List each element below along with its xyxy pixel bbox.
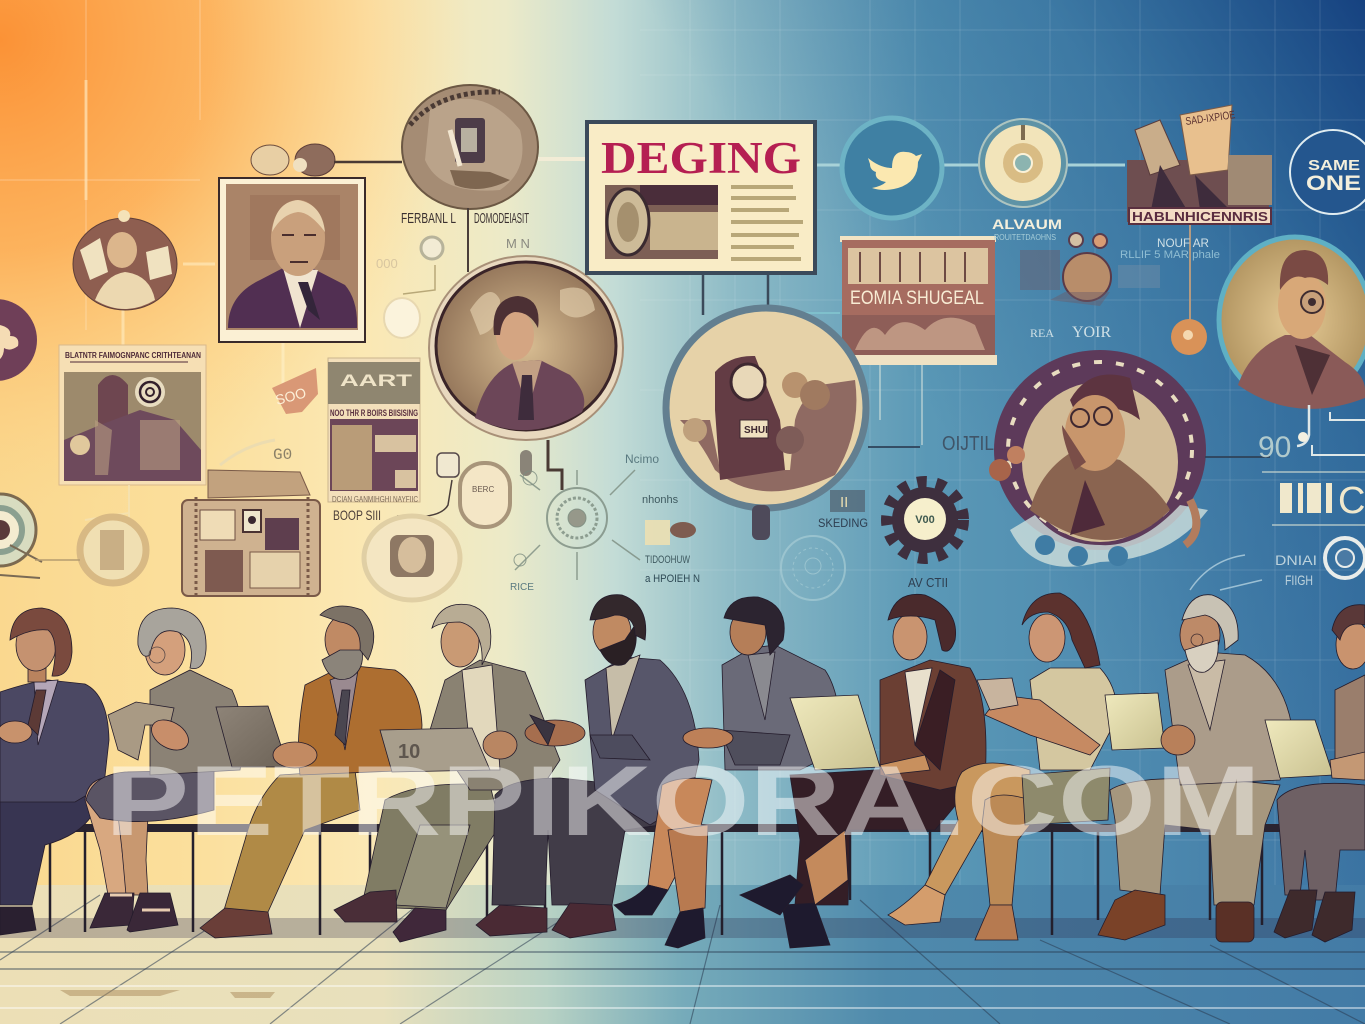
- label OIJTIL: OIJTIL: [942, 433, 994, 455]
- small label G0: G0: [273, 446, 292, 464]
- person 3: bearded man in orange jacket: [200, 606, 422, 938]
- collage of posters: HABLNHICENNRIS: [1132, 209, 1268, 224]
- right-side labels: DNIAI: [1275, 552, 1317, 568]
- person 2: grey-haired woman with magazine: [85, 608, 243, 932]
- chairs row: [40, 824, 1365, 935]
- doodle labels: Ncimo: [625, 452, 659, 466]
- medallion: young man portrait: [429, 256, 623, 440]
- right-side labels: [1190, 412, 1365, 590]
- newsletter board DEGING: [585, 120, 817, 275]
- collage of posters: [1127, 105, 1272, 224]
- faint seal: [781, 536, 845, 600]
- icon: bird in ring: [842, 118, 942, 218]
- doodle labels: a HPOIEH N: [645, 573, 700, 585]
- caption under camera medallion: DOMODEIASIT: [474, 210, 529, 227]
- person 9: old man with tablet: [1098, 595, 1294, 942]
- middle diagram labels: ALVAUM: [992, 216, 1062, 232]
- banner EOMIA SHUGEAL: EOMIA SHUGEAL: [850, 288, 984, 309]
- middle diagram labels: NOUF AR: [1157, 236, 1209, 250]
- medallion: robot figure: [666, 308, 866, 540]
- person 6: man in grey jacket with laptop: [683, 597, 841, 770]
- framed poster: spiral scene: [59, 345, 206, 485]
- small label G0: [220, 440, 292, 465]
- label SKEDING and box: SKEDING: [818, 516, 868, 530]
- caption under camera medallion: [376, 210, 530, 338]
- medallion: robot figure: SHUI: [744, 425, 768, 436]
- gear icon with cream center: [889, 484, 961, 556]
- person 8: woman with phone in cream top: [888, 593, 1117, 940]
- doodle labels: TIDOOHUW: [645, 554, 690, 566]
- middle diagram labels: YOIR: [1072, 324, 1111, 341]
- right-side labels: 90: [1258, 431, 1291, 464]
- medallion: top camera: [402, 85, 538, 209]
- person 1: woman in dark suit: [0, 608, 109, 935]
- gauge at left edge: [0, 494, 42, 578]
- label SKEDING and box: [818, 490, 868, 530]
- caption under camera medallion: 000: [376, 256, 398, 271]
- icon: paired rolls: [251, 144, 335, 176]
- person 4: man in grey-olive jacket with tablet: [334, 604, 560, 942]
- gear icon with cream center: V00: [915, 514, 935, 526]
- doodle labels: [510, 452, 700, 593]
- person 10: woman with laptop at right edge: [1265, 605, 1365, 942]
- pendant icon: [1171, 319, 1207, 355]
- floor: [0, 885, 1365, 1024]
- tag: SOO: [272, 368, 318, 414]
- right-side labels: FIIGH: [1285, 572, 1313, 588]
- framed portrait: gentleman: [219, 178, 365, 342]
- stacked poster: ART: BOOP SIII: [333, 507, 381, 523]
- heels and legs of seated figure: [614, 778, 712, 948]
- caption under camera medallion: M N: [506, 236, 530, 251]
- small seal: [80, 517, 146, 583]
- clock medallion: [979, 119, 1067, 207]
- doodle labels: nhonhs: [642, 494, 679, 506]
- middle diagram labels: REA: [1030, 326, 1054, 340]
- newsletter board DEGING: DEGING: [601, 133, 801, 183]
- middle diagram labels: RLLIF 5 MAR phale: [1120, 249, 1220, 261]
- oval gauge: [397, 440, 562, 527]
- oval gauge: BERC: [472, 485, 494, 494]
- middle diagram labels: ROUITETDAOHNS: [994, 233, 1056, 242]
- machine device illustration: [182, 470, 320, 596]
- framed poster: spiral scene: BLATNTR FAIMOGNPANC CRITHTEANAN: [65, 351, 201, 360]
- label SKEDING and box: II: [840, 494, 848, 511]
- right-side labels: C: [1338, 480, 1365, 522]
- person 4: man in grey-olive jacket with tablet: 10: [398, 741, 420, 763]
- banner EOMIA SHUGEAL: [840, 236, 997, 365]
- stacked poster: ART: NOO THR R BOIRS BIISISING: [330, 408, 418, 418]
- circle badge SAME ONE: ONE: [1306, 172, 1361, 195]
- person 7: woman in brown blazer: [740, 594, 986, 948]
- text: AV CTII: [908, 575, 948, 590]
- caption under camera medallion: FERBANL L: [401, 210, 456, 227]
- medallion: reader with papers: [73, 210, 177, 310]
- stacked poster: ART: AART: [340, 371, 413, 390]
- circle badge SAME ONE: SAME: [1308, 157, 1360, 174]
- circle badge SAME ONE: [1290, 130, 1365, 214]
- sunburst doodle: [514, 470, 640, 580]
- person 5: bearded man in grey suit: [476, 595, 699, 938]
- portrait circle with glasses: [1219, 237, 1365, 409]
- portrait seal bottom: [364, 516, 460, 600]
- icon: purple circle with cloud: [0, 299, 37, 381]
- doodle labels: RICE: [510, 582, 534, 593]
- watermark: PETRPIKORA.COM: [105, 745, 1261, 856]
- tag: SOO: SOO: [274, 384, 308, 408]
- stacked poster: ART: DCIAN GANMIHGHI NAYFIIC: [332, 495, 418, 504]
- stacked poster: ART: [328, 358, 420, 523]
- wheel portrait medallion: [989, 350, 1208, 567]
- collage of posters: SAD-IXPIOE: [1185, 109, 1236, 128]
- middle diagram labels: [992, 216, 1220, 341]
